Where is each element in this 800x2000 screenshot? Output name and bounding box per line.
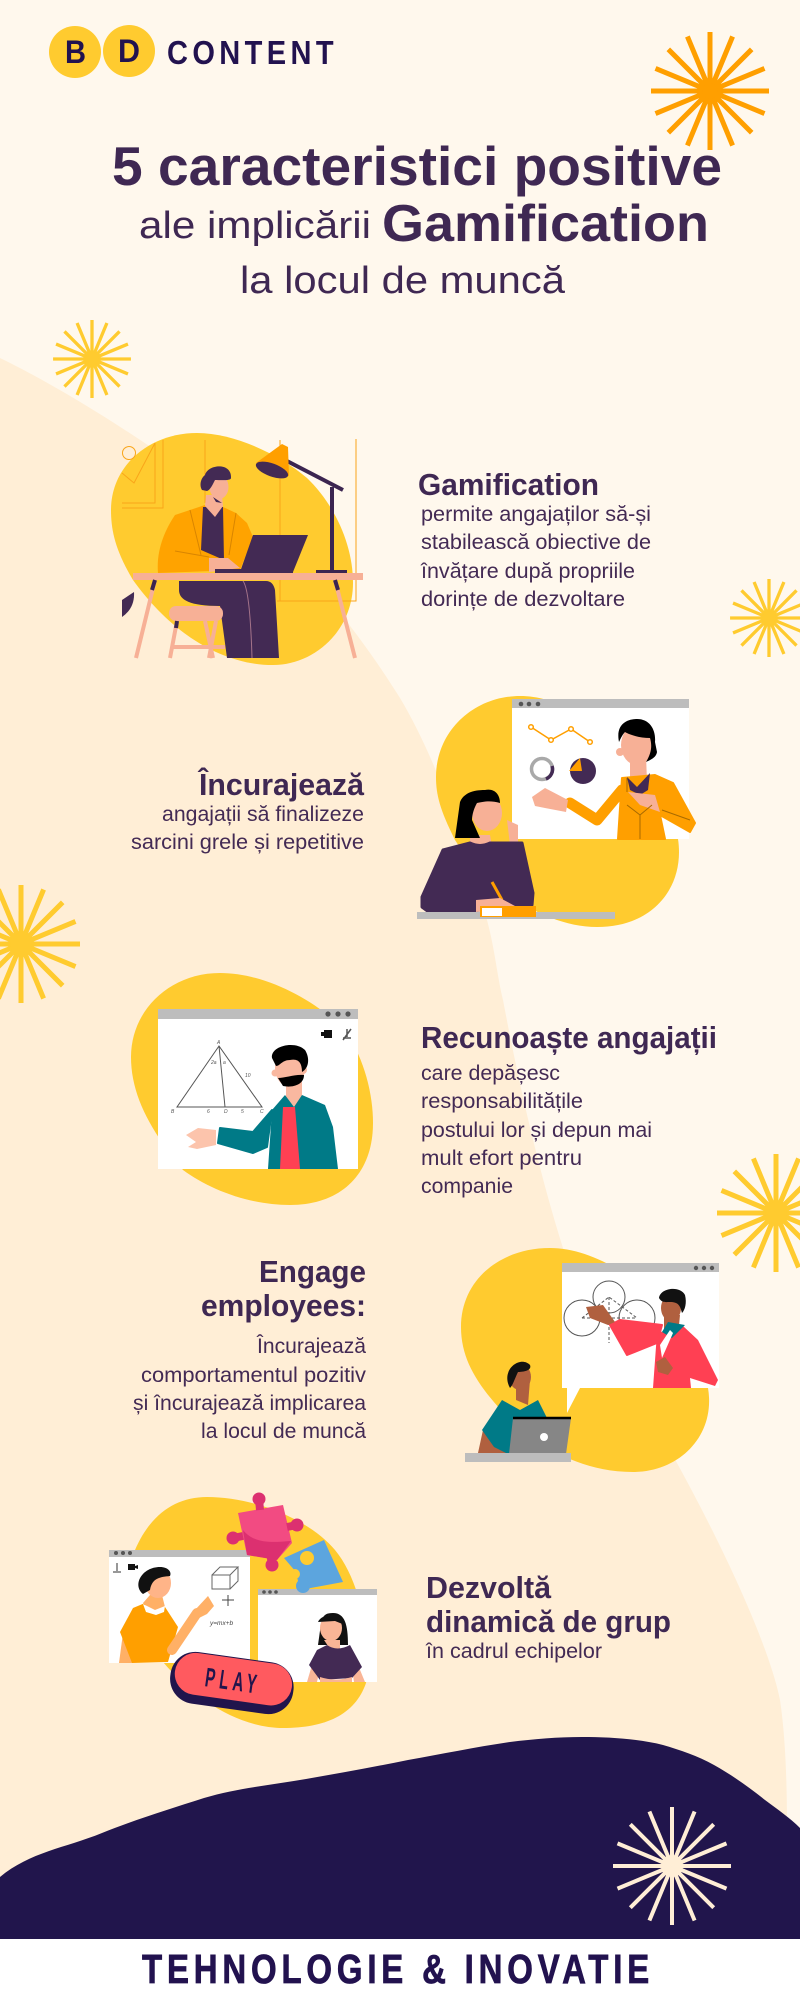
panel: illustration teacher with triangle: C	[260, 1109, 264, 1115]
icon: yellow sunburst near title	[53, 320, 131, 398]
text block: Engage employees: Engage	[259, 1254, 366, 1289]
panel: illustration online game	[109, 1492, 377, 1728]
background wave shape	[0, 358, 787, 1939]
panel: illustration presenter with laptop	[461, 1248, 719, 1472]
text block: Engage employees: Încurajează	[256, 1335, 366, 1358]
text block: Dezvoltă dinamică de grup: dinamică de grup	[426, 1604, 671, 1639]
panel: illustration teacher with triangle: 2a	[210, 1060, 217, 1066]
panel: illustration man at desk	[111, 433, 363, 665]
text block: Gamification	[418, 467, 651, 611]
text block: Recunoaște angajații: responsabilitățile	[421, 1090, 583, 1113]
title: 5 caracteristici positive	[112, 135, 722, 197]
panel: illustration teacher with triangle: D	[224, 1109, 228, 1115]
panel: illustration presentation woman	[417, 696, 695, 927]
logo	[49, 25, 338, 78]
text block: Recunoaște angajații: mult efort pentru	[421, 1147, 582, 1170]
text block: Dezvoltă dinamică de grup: în cadrul echipelor	[425, 1640, 602, 1663]
panel: illustration teacher with triangle: 10	[245, 1073, 251, 1079]
text block: Dezvoltă dinamică de grup	[425, 1570, 671, 1663]
footer label: TEHNOLOGIE & INOVATIE	[142, 1946, 654, 1992]
panel: illustration online game: PLAY	[203, 1662, 263, 1700]
text block: Engage employees: comportamentul pozitiv	[141, 1364, 367, 1387]
text block: Dezvoltă dinamică de grup: Dezvoltă	[426, 1570, 552, 1605]
panel: illustration teacher with triangle: 6	[207, 1109, 210, 1115]
text block: Engage employees	[133, 1254, 367, 1443]
logo: CONTENT	[167, 34, 338, 71]
text block: Încurajează: Încurajează	[197, 766, 365, 802]
footer navy wave	[0, 1737, 800, 1939]
text block: Gamification: permite angajaților să-și	[421, 503, 651, 526]
text block: Recunoaște angajații: postului lor și depun mai	[421, 1119, 652, 1142]
text block: Încurajează	[131, 766, 365, 854]
text block: Engage employees: și încurajează implicarea	[133, 1392, 366, 1415]
panel: illustration online game: y=mx+b	[209, 1620, 234, 1627]
panel: illustration teacher with triangle	[131, 973, 373, 1205]
title: la locul de muncă	[240, 260, 566, 302]
icon: yellow sunburst right 2	[717, 1154, 800, 1272]
text block: Engage employees: la locul de muncă	[201, 1420, 366, 1443]
text block: Recunoaște angajații	[421, 1020, 717, 1198]
panel: illustration teacher with triangle: a	[223, 1060, 226, 1066]
text block: Gamification: dorințe de dezvoltare	[421, 588, 625, 611]
text block: Încurajează: sarcini grele și repetitive	[131, 831, 364, 854]
icon: yellow sunburst right 1	[730, 579, 800, 657]
panel: illustration teacher with triangle: 5	[241, 1109, 244, 1115]
text block: Gamification: învățare după propriile	[420, 560, 635, 583]
text block: Recunoaște angajații: companie	[421, 1175, 513, 1198]
text block: Gamification: Gamification	[418, 467, 599, 502]
title: Gamification	[382, 195, 709, 253]
panel: illustration teacher with triangle: A	[216, 1040, 221, 1046]
icon: orange sunburst top right	[651, 32, 769, 150]
icon: cream sunburst footer	[613, 1807, 731, 1925]
logo: D	[118, 33, 140, 69]
panel: illustration teacher with triangle: B	[171, 1109, 175, 1115]
title	[112, 135, 722, 302]
text block: Recunoaște angajații: care depășesc	[421, 1062, 560, 1085]
logo: B	[65, 34, 86, 70]
text block: Încurajează: angajații să finalizeze	[162, 803, 364, 826]
icon: yellow sunburst left	[0, 885, 80, 1003]
title: ale implicării	[139, 205, 371, 247]
text block: Recunoaște angajații: Recunoaște angajații	[421, 1020, 717, 1055]
footer label	[0, 1939, 800, 2000]
text block: Gamification: stabilească obiective de	[421, 531, 651, 554]
text block: Engage employees: employees:	[201, 1288, 366, 1323]
